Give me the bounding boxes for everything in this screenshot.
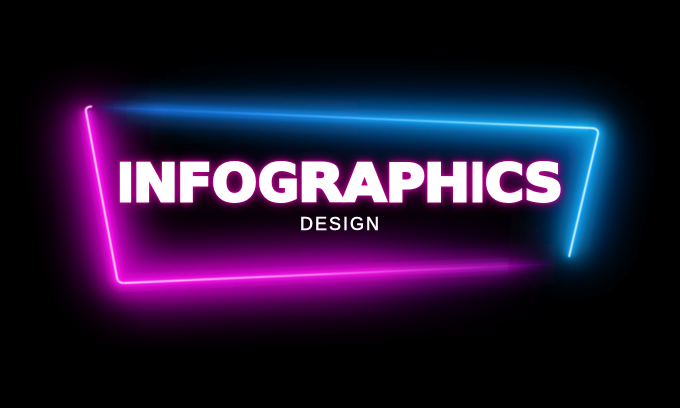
title: INFOGRAPHICS: H (424, 154, 470, 214)
title: INFOGRAPHICS (117, 154, 563, 214)
subtitle: DESIGN: DESIGN (300, 214, 381, 234)
neon line: magenta left and bottom (86, 106, 556, 283)
title: INFOGRAPHICS: A (343, 154, 386, 214)
title: INFOGRAPHICS: S (524, 154, 563, 214)
wide ambient glow (86, 108, 596, 282)
title: INFOGRAPHICS: P (386, 154, 425, 214)
title: INFOGRAPHICS: O (212, 154, 257, 214)
neon line: blue top and right (96, 107, 598, 257)
title: INFOGRAPHICS: N (133, 154, 178, 214)
title: INFOGRAPHICS: F (177, 154, 212, 214)
title: INFOGRAPHICS: G (258, 154, 299, 214)
title: INFOGRAPHICS: I (117, 154, 134, 214)
title glow (125, 168, 555, 198)
title: INFOGRAPHICS: C (485, 154, 524, 214)
title: INFOGRAPHICS: I (470, 154, 485, 214)
title: INFOGRAPHICS: R (298, 154, 344, 214)
